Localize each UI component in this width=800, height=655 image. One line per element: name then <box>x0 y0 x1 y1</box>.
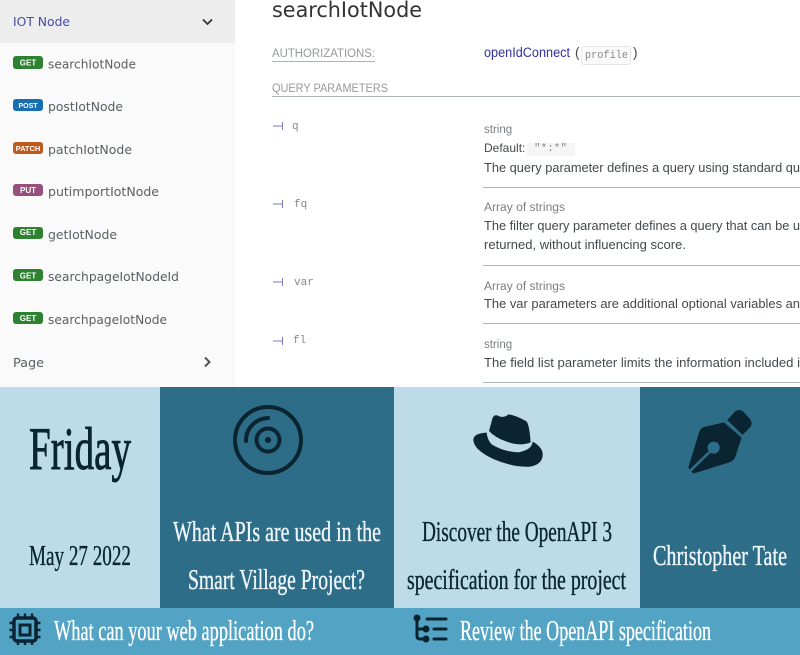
parameter: fl: The field list parameter limits the information included i <box>484 356 800 370</box>
discover text: specification for the project <box>407 565 626 596</box>
item: postIotNode: POST <box>18 103 38 110</box>
discover text: Discover the OpenAPI 3 <box>422 517 612 548</box>
panel: bottom bar <box>0 608 800 655</box>
item: postIotNode <box>13 99 123 114</box>
item: getIotNode: getIotNode <box>48 227 117 242</box>
item: putimportIotNode: PUT <box>20 186 36 195</box>
parameter: var: The var parameters are additional optional variables an <box>484 297 800 311</box>
parameter: var <box>273 277 800 324</box>
item: searchpageIotNode: GET <box>20 314 36 323</box>
date text: May 27 2022 <box>29 541 131 572</box>
parameter: fq <box>273 199 800 266</box>
item: postIotNode: postIotNode <box>48 99 123 114</box>
icon: fedora hat <box>473 414 543 467</box>
parameter: fq: The filter query parameter defines a query that can be u <box>484 219 800 233</box>
panel: endpoint documentation <box>272 0 800 383</box>
item: searchIotNode <box>13 56 136 72</box>
parameter: fq: Array of strings <box>484 202 565 214</box>
icon: chevron down <box>203 20 212 24</box>
icon: disc <box>235 407 301 473</box>
parameter: fq: fq <box>294 199 307 211</box>
parameter: fl: fl <box>293 335 306 347</box>
heading: Friday: Friday <box>29 416 131 482</box>
icon: cpu chip <box>10 614 40 645</box>
item: getIotNode: GET <box>20 228 36 237</box>
icon: chevron right <box>205 358 210 366</box>
parameter: var: var <box>294 277 314 289</box>
link text: web application: What can your web application do? <box>54 616 314 647</box>
parameter: fl <box>273 335 800 383</box>
parameter: q <box>273 121 800 188</box>
parameter: q: string <box>484 124 512 136</box>
parameter: q: q <box>292 121 299 133</box>
authorizations value: ) <box>633 45 638 60</box>
item: putimportIotNode: putimportIotNode <box>48 184 159 199</box>
panel: date <box>0 387 160 608</box>
authorizations value: ( <box>575 45 580 60</box>
item: searchpageIotNode: searchpageIotNode <box>48 312 167 327</box>
icon: list tree <box>415 616 446 641</box>
item: searchIotNode: searchIotNode <box>48 56 136 72</box>
panel: discover <box>394 387 640 608</box>
authorizations value: profile <box>585 50 628 62</box>
icon: fountain pen <box>688 410 752 474</box>
authorizations label: AUTHORIZATIONS: <box>272 48 375 60</box>
question text <box>173 517 381 596</box>
item: patchIotNode: patchIotNode <box>48 142 132 157</box>
question text: Smart Village Project? <box>188 565 365 596</box>
heading: IOT Node: IOT Node <box>13 14 70 29</box>
parameter: var: Array of strings <box>484 281 565 293</box>
item: searchpageIotNodeId: searchpageIotNodeId <box>48 269 179 284</box>
question text: What APIs are used in the <box>173 517 381 548</box>
item: searchpageIotNodeId: GET <box>20 272 36 280</box>
authorizations value: openIdConnect <box>484 45 570 60</box>
panel: author <box>640 387 800 608</box>
parameter: fq: returned, without influencing score. <box>484 238 686 252</box>
heading: query parameters: QUERY PARAMETERS <box>272 83 388 95</box>
panel: API docs sidebar <box>0 0 235 387</box>
item: patchIotNode: PATCH <box>16 144 40 153</box>
discover text <box>407 517 626 596</box>
panel: question <box>160 387 394 608</box>
parameter: q: "*:*" <box>534 143 567 155</box>
parameter: q: The query parameter defines a query using standard qu <box>484 161 800 175</box>
item: Page: Page <box>13 355 44 370</box>
item: getIotNode <box>13 227 117 242</box>
item: searchIotNode: GET <box>20 58 36 68</box>
authorizations value <box>484 45 638 64</box>
parameter: q: Default: <box>484 141 525 155</box>
parameter: fl: string <box>484 339 512 351</box>
